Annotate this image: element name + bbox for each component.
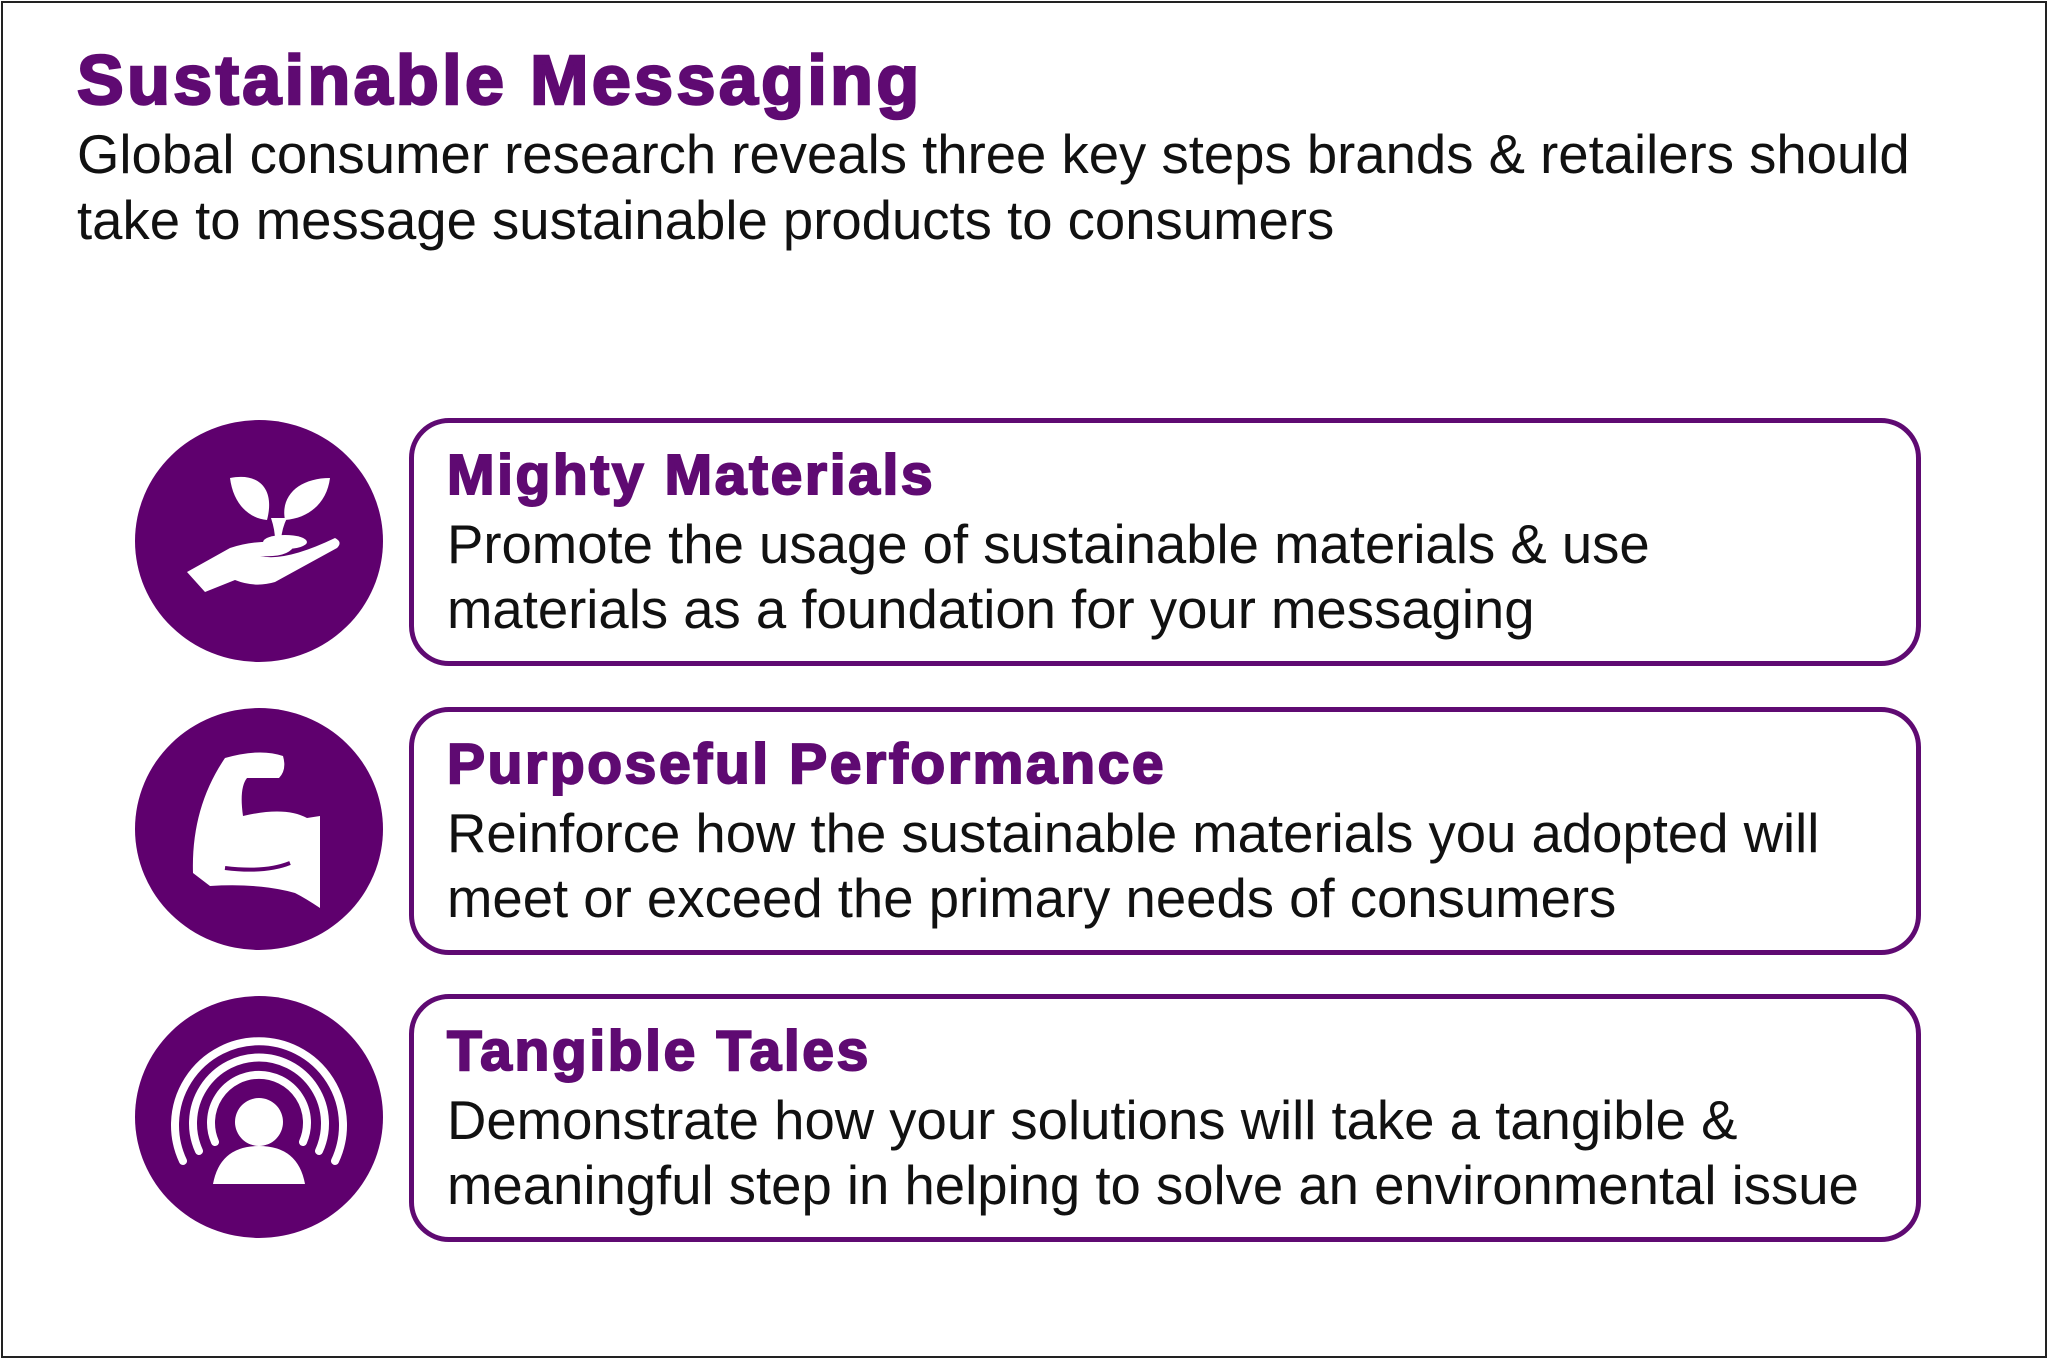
heading: Tangible Tales	[447, 1019, 871, 1083]
title: Sustainable Messaging	[77, 41, 923, 119]
subtitle: take to message sustainable products to consumers	[77, 190, 1334, 251]
heading: Mighty Materials	[447, 443, 935, 507]
panel: mighty materials	[409, 418, 1921, 666]
text	[447, 803, 1819, 929]
text: meaningful step in helping to solve an environmental issue	[447, 1155, 1859, 1216]
heading: Purposeful Performance	[447, 732, 1166, 796]
text: Reinforce how the sustainable materials you adopted will	[447, 803, 1819, 864]
icon: flexed arm	[135, 708, 383, 950]
panel: purposeful performance	[409, 707, 1921, 955]
panel: tangible tales	[409, 994, 1921, 1242]
icon: person with radiating waves	[135, 996, 383, 1238]
text: Demonstrate how your solutions will take a tangible &	[447, 1090, 1738, 1151]
text	[447, 514, 1650, 640]
text: materials as a foundation for your messaging	[447, 579, 1535, 640]
subtitle	[77, 124, 1910, 251]
text	[447, 1090, 1859, 1216]
icon: hand with plant	[135, 420, 383, 662]
subtitle: Global consumer research reveals three key steps brands & retailers should	[77, 124, 1910, 185]
text: Promote the usage of sustainable materials & use	[447, 514, 1650, 575]
text: meet or exceed the primary needs of consumers	[447, 868, 1616, 929]
